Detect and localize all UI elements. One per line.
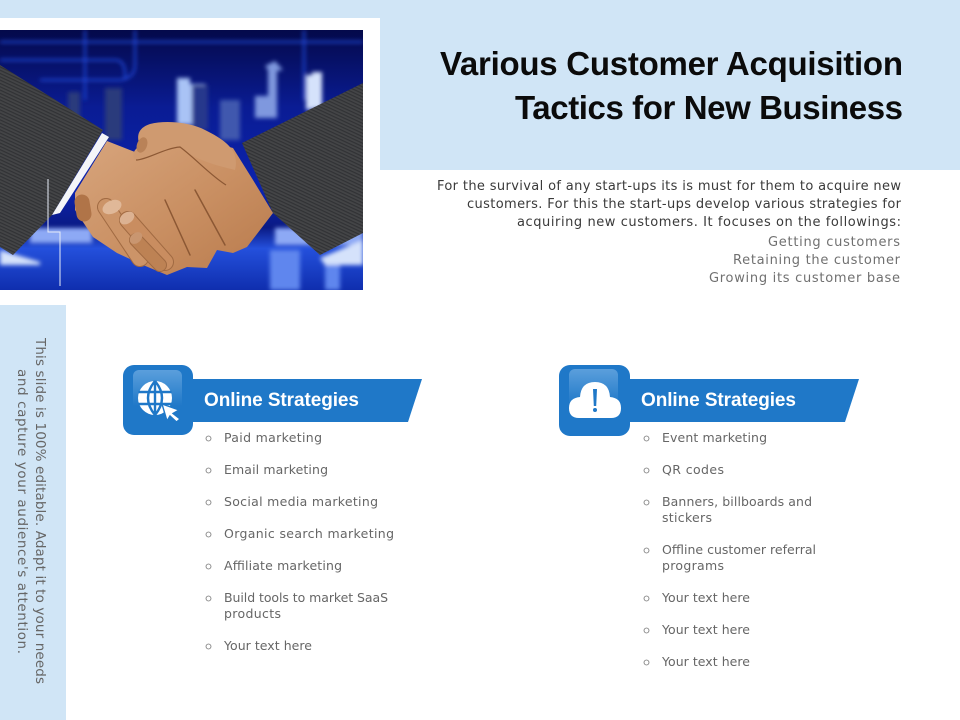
focus list	[709, 235, 901, 286]
left heading: Online Strategies	[204, 390, 359, 411]
side panel rotated note: This slide is 100% editable. Adapt it to your needs	[32, 337, 48, 684]
intro paragraph: customers. For this the start-ups develop various strategies for	[467, 197, 902, 212]
left list: Social media marketing	[224, 494, 378, 509]
icon: globe with cursor	[138, 381, 180, 422]
right list: Event marketing	[662, 430, 767, 445]
left list: Your text here	[223, 638, 312, 653]
intro paragraph: acquiring new customers. It focuses on the followings:	[517, 215, 901, 230]
title background band	[0, 0, 960, 170]
right list: Banners, billboards and	[662, 494, 812, 509]
fingers	[82, 190, 225, 265]
hands	[75, 122, 273, 275]
focus list: Getting customers	[768, 235, 900, 250]
right heading: Online Strategies	[641, 390, 796, 411]
thumb	[133, 122, 236, 170]
right list	[644, 430, 816, 669]
right list: Your text here	[661, 622, 750, 637]
left list: Build tools to market SaaS	[224, 590, 388, 605]
right list: Offline customer referral	[662, 542, 816, 557]
right list: stickers	[662, 510, 712, 525]
left list: Affiliate marketing	[224, 558, 342, 573]
right list: programs	[662, 558, 724, 573]
right banner	[627, 379, 859, 422]
intro paragraph	[437, 179, 902, 230]
title: Various Customer Acquisition	[440, 45, 903, 82]
left banner	[190, 379, 422, 422]
left list: Paid marketing	[224, 430, 322, 445]
left list: products	[224, 606, 281, 621]
shirt cuff	[52, 133, 109, 215]
panel: left strategies	[123, 365, 422, 653]
icon: cloud with exclamation	[569, 382, 621, 418]
panel: right strategies	[559, 365, 859, 669]
intro paragraph: For the survival of any start-ups its is must for them to acquire new	[437, 179, 901, 194]
title	[440, 45, 903, 126]
title: Tactics for New Business	[515, 89, 903, 126]
white circuit line	[48, 179, 60, 286]
photo frame	[0, 18, 380, 305]
left sleeve	[0, 65, 103, 255]
left icon tile	[123, 365, 193, 435]
side panel rotated note: and capture your audience's attention.	[14, 369, 30, 654]
right sleeve	[242, 83, 363, 255]
right list: Your text here	[661, 654, 750, 669]
focus list: Retaining the customer	[733, 253, 901, 268]
focus list: Growing its customer base	[709, 271, 900, 286]
left list: Email marketing	[224, 462, 328, 477]
side panel rotated note	[14, 337, 48, 684]
right list: QR codes	[662, 462, 724, 477]
right icon tile	[559, 365, 630, 436]
side panel	[0, 305, 66, 720]
left list: Organic search marketing	[224, 526, 394, 541]
right list: Your text here	[661, 590, 750, 605]
photo: handshake	[0, 30, 363, 290]
left list	[206, 430, 394, 653]
